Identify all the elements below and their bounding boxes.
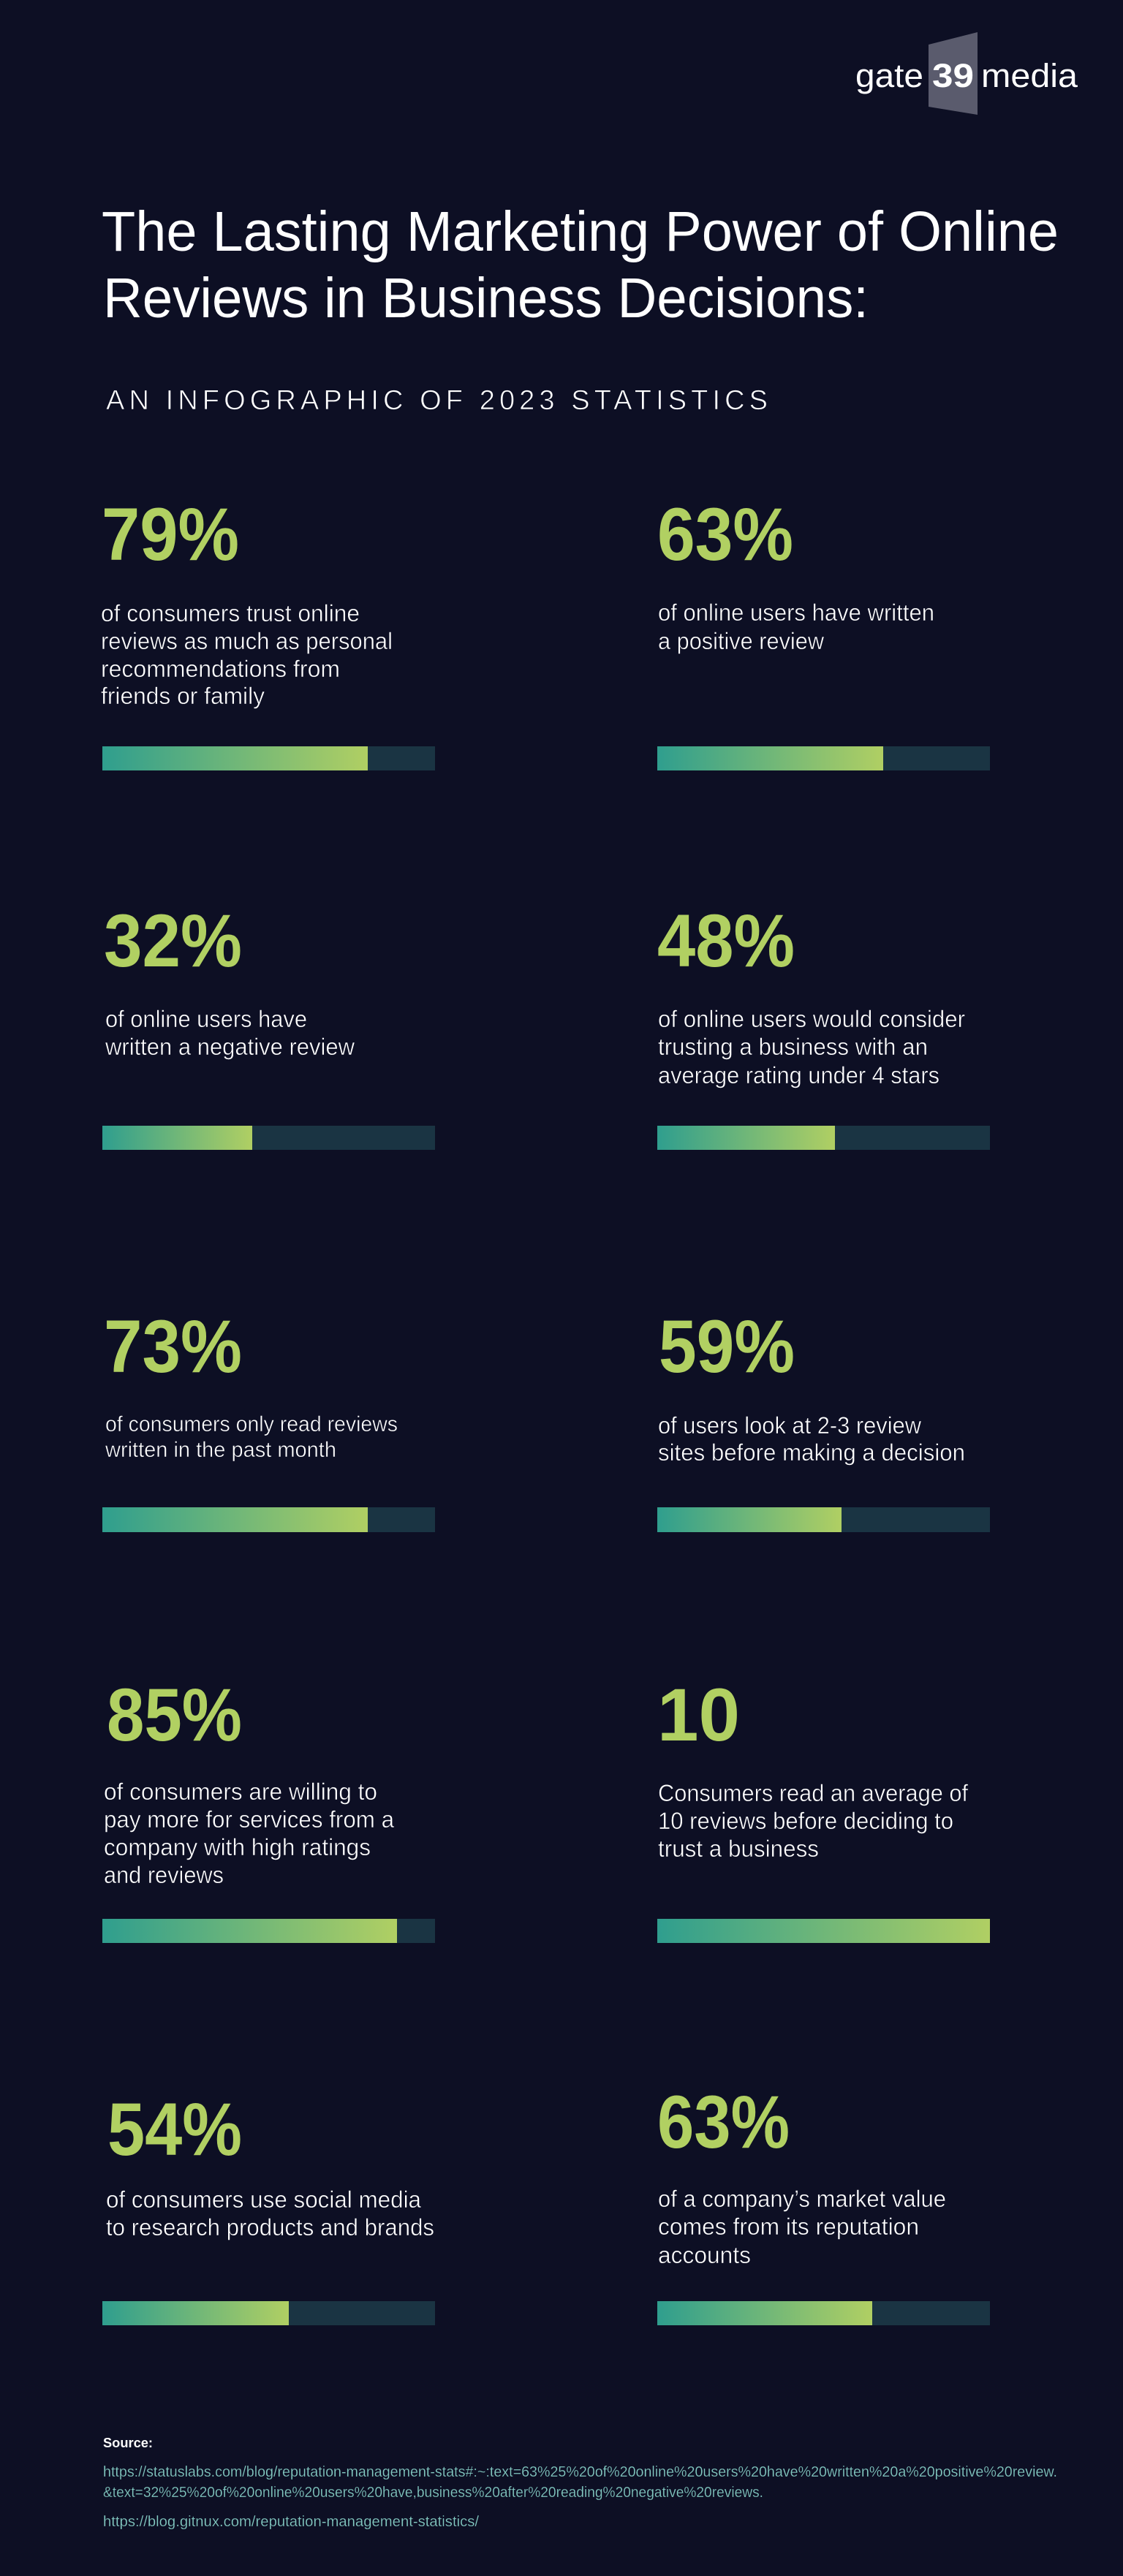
description: of consumers use social media [106, 2186, 421, 2213]
description: to research products and brands [106, 2214, 434, 2240]
description: friends or family [101, 683, 265, 709]
description [658, 1006, 965, 1088]
progress bar 54% [102, 2301, 435, 2325]
description: of users look at 2-3 review [658, 1412, 922, 1439]
description: of a company’s market value [658, 2186, 946, 2212]
description: and reviews [104, 1862, 224, 1888]
description: of online users have [105, 1006, 307, 1032]
stat number: 63% [657, 493, 793, 576]
description [658, 2186, 946, 2268]
panel: 10 reviews [657, 1673, 990, 1943]
stat number: 63% [657, 2080, 790, 2164]
description: trust a business [658, 1836, 819, 1862]
stat number: 79% [102, 493, 239, 576]
description [658, 1412, 965, 1466]
panel: 54% social media [102, 2088, 435, 2325]
description: written a negative review [105, 1034, 355, 1060]
description: recommendations from [101, 656, 340, 682]
title: Reviews in Business Decisions: [103, 267, 869, 330]
stat number: 32% [104, 899, 242, 982]
progress bar 73% [102, 1507, 435, 1532]
stat number: 59% [659, 1305, 795, 1388]
description [105, 1006, 355, 1060]
panel: 63% market value [657, 2080, 990, 2325]
source links [103, 2464, 1057, 2530]
panel: 48% under 4 stars [657, 899, 990, 1150]
logo number: 39: 39 [932, 57, 974, 94]
description [658, 1780, 968, 1862]
panel: 79% trust reviews [101, 493, 435, 770]
source links: &text=32%25%20of%20online%20users%20have,business%20after%20reading%20negative%20reviews. [103, 2485, 763, 2501]
description [658, 599, 934, 654]
description: written in the past month [105, 1438, 336, 1462]
logo door shape [929, 32, 978, 115]
title [102, 200, 1059, 330]
progress bar 10 [657, 1919, 990, 1943]
source heading: Source: [103, 2436, 153, 2450]
subtitle: AN INFOGRAPHIC OF 2023 STATISTICS [106, 385, 768, 416]
progress bar 79% [102, 746, 435, 770]
title: The Lasting Marketing Power of Online [102, 200, 1059, 263]
sources [103, 2436, 1057, 2530]
panel: 63% positive review [657, 493, 990, 770]
progress bar 63% [657, 746, 990, 770]
logo word: media: media [981, 57, 1078, 94]
description: of consumers are willing to [104, 1778, 377, 1805]
description [106, 2186, 434, 2240]
stat number: 10 [657, 1673, 740, 1757]
source links: https://statuslabs.com/blog/reputation-management-stats#:~:text=63%25%20of%20online%20users%20have%20written%20a%20positive%20review. [103, 2464, 1057, 2480]
progress bar 48% [657, 1126, 990, 1150]
logo word: gate: gate [855, 57, 923, 94]
progress bar 85% [102, 1919, 435, 1943]
description: of online users have written [658, 599, 934, 626]
source links: https://blog.gitnux.com/reputation-management-statistics/ [103, 2514, 479, 2530]
panel: 73% recent reviews [102, 1305, 435, 1532]
progress bar 59% [657, 1507, 990, 1532]
description: sites before making a decision [658, 1439, 965, 1466]
description: a positive review [658, 628, 825, 654]
description: reviews as much as personal [101, 628, 393, 654]
description [105, 1412, 398, 1462]
description: 10 reviews before deciding to [658, 1808, 953, 1834]
stat number: 73% [104, 1305, 242, 1388]
stat number: 48% [657, 899, 795, 982]
description [104, 1778, 394, 1888]
panel: 32% negative review [102, 899, 435, 1150]
description: company with high ratings [104, 1834, 371, 1860]
panel: 59% review sites [657, 1305, 990, 1532]
description: of consumers only read reviews [105, 1412, 398, 1436]
description: of consumers trust online [101, 600, 360, 626]
progress bar 32% [102, 1126, 435, 1150]
panel: 85% pay more [102, 1673, 435, 1943]
description: pay more for services from a [104, 1806, 394, 1833]
description: Consumers read an average of [658, 1780, 968, 1806]
stat number: 54% [107, 2088, 242, 2171]
description: comes from its reputation [658, 2213, 919, 2240]
progress bar 63% [657, 2301, 990, 2325]
description: trusting a business with an [658, 1034, 928, 1060]
description: of online users would consider [658, 1006, 965, 1032]
description: average rating under 4 stars [658, 1062, 939, 1088]
description: accounts [658, 2242, 751, 2268]
description [101, 600, 393, 709]
stat number: 85% [107, 1673, 242, 1757]
logo: gate 39 media [855, 32, 1078, 115]
